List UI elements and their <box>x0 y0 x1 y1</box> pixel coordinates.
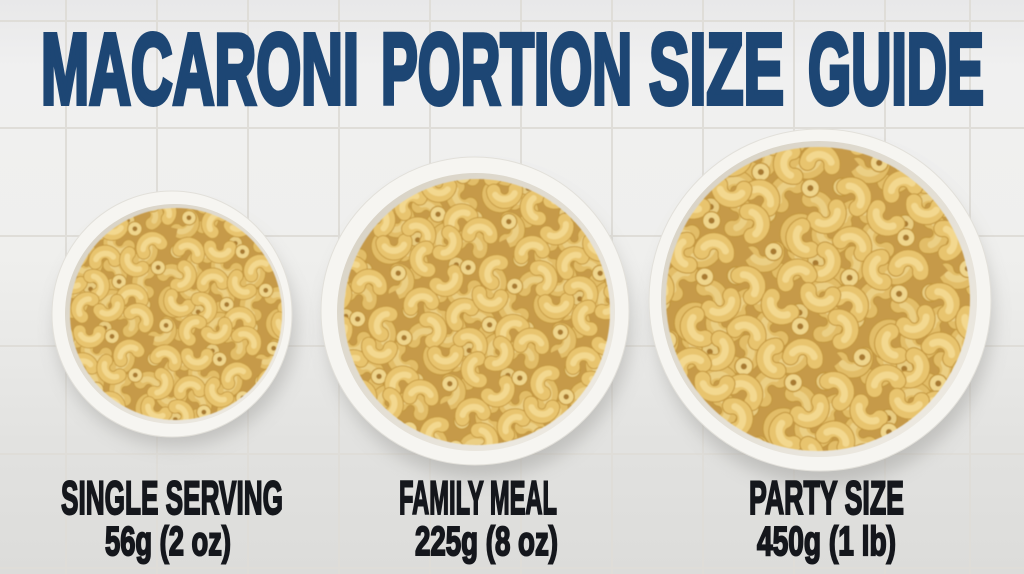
title: MACARONI <box>41 14 359 126</box>
label: single serving: 56g (2 oz) <box>105 518 231 564</box>
label: single serving <box>61 471 283 564</box>
label: family meal: 225g (8 oz) <box>415 518 558 564</box>
label: party size <box>749 471 904 564</box>
large bowl: party size <box>649 129 993 485</box>
title: PORTION <box>381 14 632 126</box>
title <box>41 14 984 126</box>
label: family meal: FAMILY MEAL <box>399 471 557 524</box>
label: party size: PARTY SIZE <box>749 471 904 524</box>
label: family meal <box>399 471 558 564</box>
label: single serving: SINGLE SERVING <box>61 471 283 524</box>
title: SIZE <box>649 14 784 126</box>
label: party size: 450g (1 lb) <box>757 518 896 564</box>
medium bowl: family meal <box>321 157 631 478</box>
small bowl: single serving <box>52 191 296 446</box>
